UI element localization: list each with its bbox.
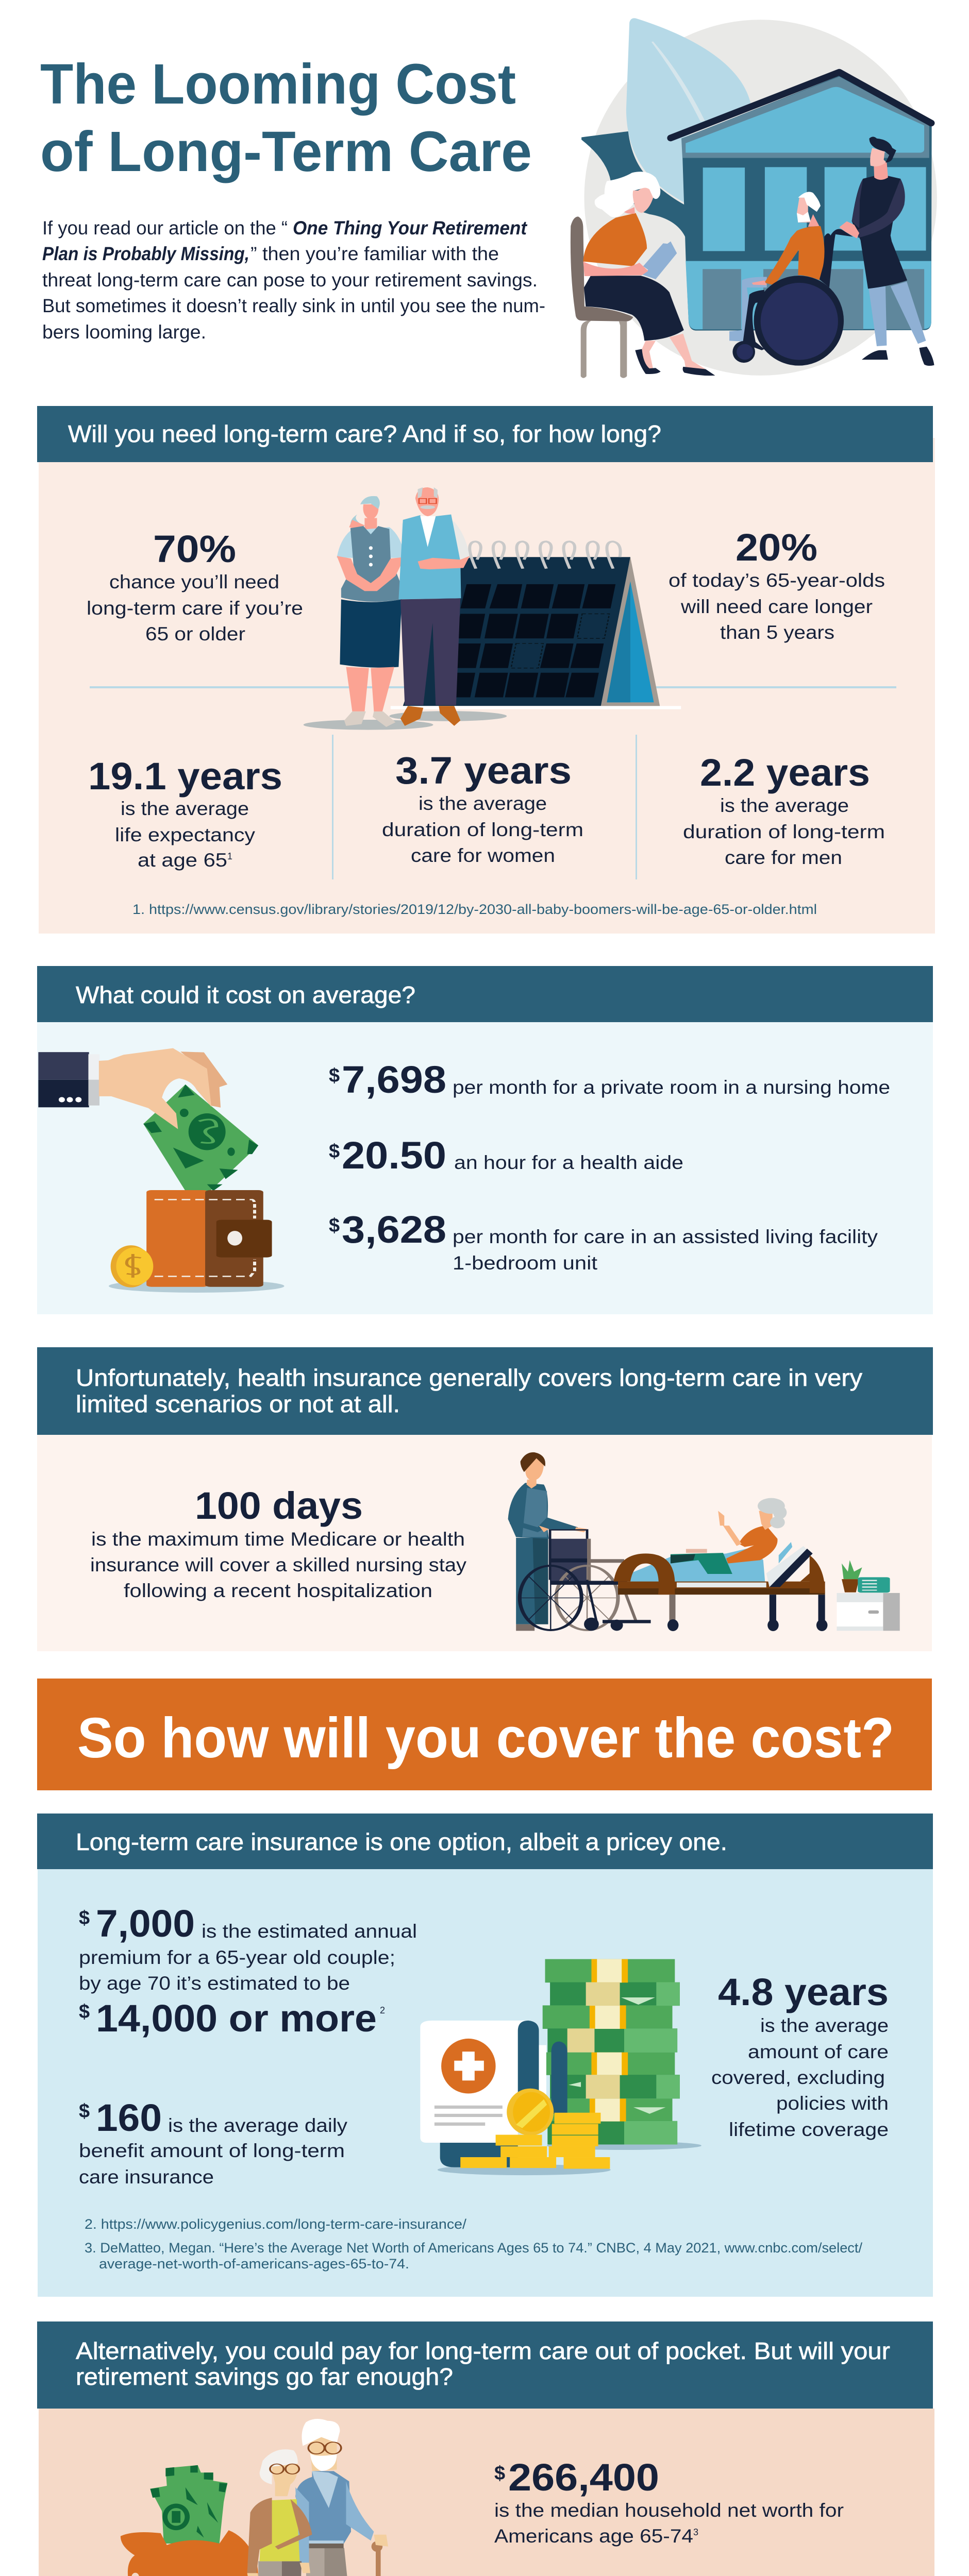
heading: Will you need long-term care? And if so, for how long? <box>68 420 661 447</box>
intro text: ” then you’re familiar with the <box>250 243 499 264</box>
stat: 20%: of today’s 65-year-olds <box>669 570 885 591</box>
footnotes 2 and 3: average-net-worth-of-americans-ages-65-to-74. <box>99 2256 409 2272</box>
stat: net worth: $ <box>494 2463 505 2484</box>
cost: assisted living: 3,628 <box>342 1208 446 1251</box>
heading: limited scenarios or not at all. <box>76 1391 400 1417</box>
stat: 100 days: 100 days <box>195 1484 363 1527</box>
title: The Looming Cost <box>40 53 516 116</box>
banner: so how will you cover the cost <box>37 1679 932 1790</box>
panel: long-term care insurance <box>37 1814 933 2297</box>
panel: will you need long-term care <box>37 406 935 934</box>
stat: 70%: 65 or older <box>145 623 245 645</box>
intro text <box>42 217 545 343</box>
stat: 4.8 years: lifetime coverage <box>729 2119 889 2140</box>
stat: annual premium: 14,000 or more <box>96 1997 377 2040</box>
stat: 4.8 years: amount of care <box>748 2041 889 2062</box>
illustration: hand putting money in wallet <box>38 1048 285 1293</box>
stat: 4.8 years: is the average <box>760 2015 889 2036</box>
cost: assisted living: 1-bedroom unit <box>453 1252 598 1274</box>
illustration: policy, money stack and coins <box>420 1959 701 2175</box>
heading: What could it cost on average? <box>76 981 415 1008</box>
stat: 4.8 years: covered, excluding <box>711 2067 885 2088</box>
stat: women duration <box>382 749 583 866</box>
stat: life expectancy <box>88 755 282 871</box>
stat: life expectancy: 1 <box>227 851 232 861</box>
stat: 70% <box>87 528 303 645</box>
stat: 70%: 70% <box>153 528 236 570</box>
stat: 100 days: is the maximum time Medicare or health <box>91 1529 465 1550</box>
illustration: piggy bank and senior couple <box>110 2419 431 2576</box>
stat: daily benefit: 160 <box>96 2096 162 2139</box>
intro text: threat long-term care can pose to your retirement savings. <box>42 269 538 291</box>
stat: 4.8 years: policies with <box>776 2093 889 2114</box>
stat: net worth: is the median household net worth for <box>494 2500 844 2521</box>
stat: 70%: long-term care if you’re <box>87 598 303 619</box>
banner: so how will you cover the cost: So how will you cover the cost? <box>77 1706 894 1770</box>
stat: 4.8 years: 4.8 years <box>718 1971 889 2013</box>
stat: annual premium <box>79 1902 417 2040</box>
stat: women duration: duration of long-term <box>382 819 583 840</box>
stat: 100 days: insurance will cover a skilled nursing stay <box>90 1554 467 1575</box>
stat: 20%: 20% <box>736 526 817 569</box>
stat: women duration: is the average <box>419 793 547 814</box>
stat: 20%: than 5 years <box>720 622 834 643</box>
intro text: But sometimes it doesn’t really sink in until you see the num- <box>42 295 545 316</box>
stat: 20% <box>669 526 885 643</box>
stat: 100 days <box>90 1484 467 1601</box>
stat: life expectancy: is the average <box>121 798 249 819</box>
cost: assisted living: $ <box>329 1215 340 1236</box>
heading: Unfortunately, health insurance generally covers long-term care in very <box>76 1364 862 1391</box>
stat: annual premium: is the estimated annual <box>202 1921 417 1942</box>
panel: what could it cost <box>37 966 933 1314</box>
footnotes 2 and 3: 2. https://www.policygenius.com/long-term-care-insurance/ <box>85 2216 467 2232</box>
cost: health aide: an hour for a health aide <box>454 1152 683 1173</box>
title: of Long-Term Care <box>40 120 532 183</box>
heading <box>76 1364 862 1417</box>
title <box>40 53 532 183</box>
stat: 70%: chance you’ll need <box>109 571 279 592</box>
stat: women duration: care for women <box>411 845 555 866</box>
cost: nursing home: per month for a private room in a nursing home <box>453 1077 890 1098</box>
stat: annual premium: 2 <box>380 2005 385 2015</box>
stat: annual premium: $ <box>79 2001 90 2023</box>
cost: health aide: 20.50 <box>342 1134 446 1177</box>
stat: 100 days: following a recent hospitalization <box>124 1580 432 1601</box>
illustration: nursing home with caregivers <box>571 18 937 378</box>
stat: men duration: is the average <box>720 795 849 816</box>
intro text: If you read our article on the “ <box>42 217 288 239</box>
cost: nursing home: 7,698 <box>342 1058 446 1101</box>
stat: life expectancy: 19.1 years <box>88 755 282 798</box>
stat: men duration: 2.2 years <box>700 751 870 794</box>
stat: annual premium: by age 70 it’s estimated to be <box>79 1973 350 1994</box>
stat: daily benefit: $ <box>79 2100 90 2122</box>
stat: life expectancy: life expectancy <box>115 824 256 845</box>
stat: daily benefit: care insurance <box>79 2166 214 2188</box>
intro text: One Thing Your Retirement <box>293 217 528 239</box>
stat: net worth: 266,400 <box>508 2456 659 2499</box>
heading <box>76 2337 890 2390</box>
illustration: nurse, wheelchair and patient in bed <box>508 1452 900 1631</box>
panel: health insurance coverage <box>37 1347 933 1651</box>
stat: annual premium: 7,000 <box>96 1902 195 1945</box>
footnotes 2 and 3 <box>85 2216 862 2272</box>
cost: health aide <box>329 1134 683 1177</box>
intro text: bers looming large. <box>42 321 206 343</box>
panel: paying out of pocket <box>37 2321 934 2576</box>
cost: assisted living <box>329 1208 878 1274</box>
cost: health aide: $ <box>329 1141 340 1162</box>
stat: men duration: duration of long-term <box>683 821 885 842</box>
stat: annual premium: premium for a 65-year old couple; <box>79 1947 395 1968</box>
stat: daily benefit <box>79 2096 348 2188</box>
stat: net worth: 3 <box>693 2527 698 2537</box>
stat: annual premium: $ <box>79 1907 90 1929</box>
heading: retirement savings go far enough? <box>76 2363 453 2390</box>
stat: men duration: care for men <box>725 847 842 868</box>
stat: 20%: will need care longer <box>680 596 873 617</box>
stat: 4.8 years <box>711 1971 889 2140</box>
heading: Alternatively, you could pay for long-term care out of pocket. But will your <box>76 2337 890 2364</box>
heading: Long-term care insurance is one option, albeit a pricey one. <box>76 1828 727 1855</box>
stat: daily benefit: benefit amount of long-term <box>79 2140 345 2161</box>
footnotes 2 and 3: 3. DeMatteo, Megan. “Here’s the Average Net Worth of Americans Ages 65 to 74.” CNBC, 4 May 2021, www.cnbc.com/select/ <box>85 2240 862 2256</box>
stat: women duration: 3.7 years <box>395 749 572 792</box>
stat: men duration <box>683 751 885 868</box>
stat: daily benefit: is the average daily <box>168 2115 348 2136</box>
footnote 1: 1. https://www.census.gov/library/stories/2019/12/by-2030-all-baby-boomers-will-be-age-65-or-older.html <box>132 902 817 917</box>
illustration: senior couple and calendar <box>304 487 681 730</box>
cost: nursing home <box>329 1058 890 1101</box>
stat: net worth <box>494 2456 844 2547</box>
cost: assisted living: per month for care in an assisted living facility <box>453 1226 878 1247</box>
cost: nursing home: $ <box>329 1065 340 1087</box>
stat: net worth: Americans age 65-74 <box>494 2526 693 2547</box>
intro text: Plan is Probably Missing, <box>42 243 249 264</box>
stat: life expectancy: at age 65 <box>138 850 227 871</box>
